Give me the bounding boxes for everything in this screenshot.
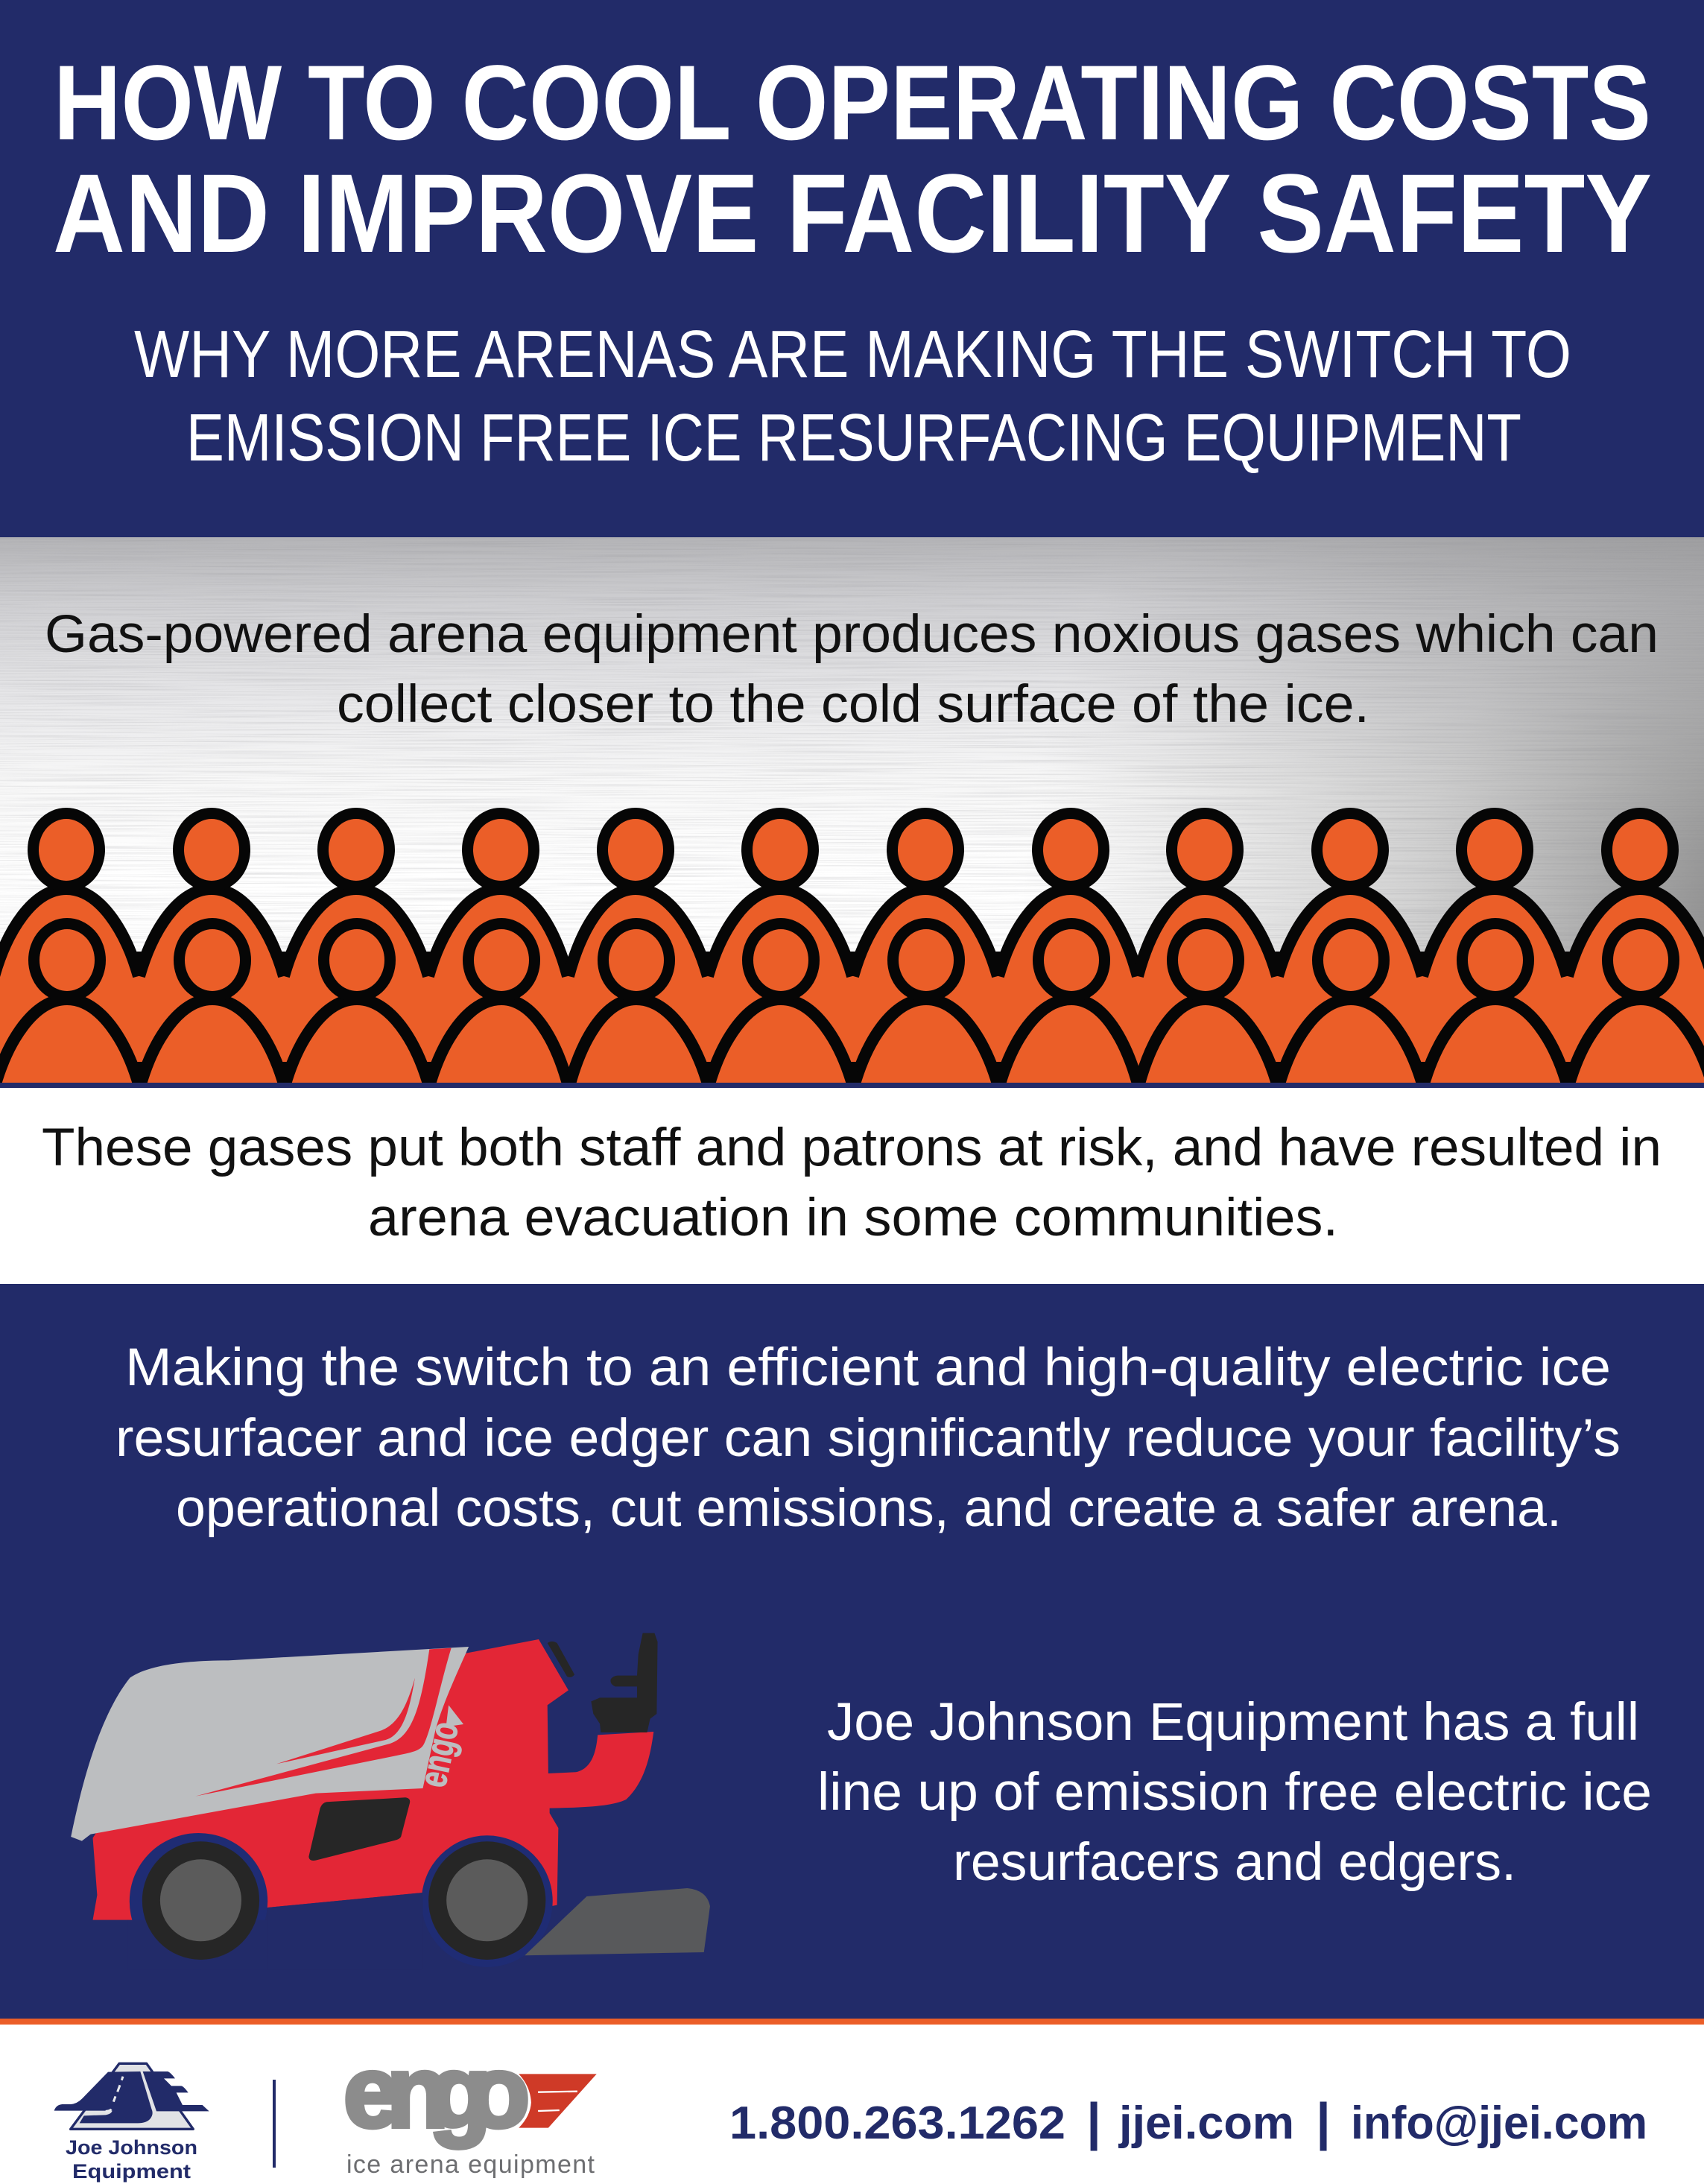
icon: electric ice resurfacer [71,1633,710,1969]
text block: making the switch: Making the switch to an efficient and high-quality electric ice [125,1338,1611,1397]
panel: header background [0,0,1704,537]
text block: noxious gases: Gas-powered arena equipment produces noxious gases which can [45,605,1659,664]
driver seat [591,1633,658,1732]
mirror [548,1642,574,1677]
subtitle [134,317,1571,475]
orange divider [0,2019,1704,2025]
wheel arches [130,1833,553,1969]
contact details: info@jjei.com [1351,2098,1647,2149]
window panel [308,1797,410,1861]
logo: Joe Johnson Equipment [54,2063,209,2183]
panel: navy lower section [0,1284,1704,2019]
text block: noxious gases: collect closer to the cold surface of the ice. [337,675,1369,734]
text block: full line up: line up of emission free electric ice [817,1763,1652,1822]
contact details: 1.800.263.1262 [729,2098,1065,2149]
logo: Joe Johnson Equipment: Joe Johnson [66,2136,197,2159]
logo: engo ice arena equipment: ice arena equipment [346,2150,595,2179]
wheels [142,1841,545,1960]
logo divider [273,2080,276,2168]
logo: Joe Johnson Equipment: Equipment [72,2160,191,2183]
logo: engo ice arena equipment: engo [343,2035,530,2148]
engo wing mark [446,1705,463,1726]
resurfacer engo label: engo [411,1718,467,1791]
text block: full line up [817,1693,1652,1892]
front row of people [0,924,1704,1086]
crowd of people [0,814,1704,1086]
text block: making the switch: resurfacer and ice edger can significantly reduce your facility’s [115,1409,1621,1468]
contact details: | [1316,2092,1331,2151]
title [53,44,1652,276]
contact details: jjei.com [1118,2098,1294,2149]
contact details [729,2092,1647,2151]
contact details: | [1086,2092,1101,2151]
text block: risk to staff and patrons: These gases put both staff and patrons at risk, and have resulted in [42,1118,1662,1177]
panel: brushed metal background [0,537,1704,1083]
text block: full line up: resurfacers and edgers. [953,1833,1516,1892]
text block: risk to staff and patrons: arena evacuation in some communities. [368,1188,1338,1247]
text block: noxious gases [45,605,1659,734]
logo: engo ice arena equipment [343,2035,597,2179]
back row of people [0,814,1704,976]
text block: making the switch: operational costs, cut emissions, and create a safer arena. [176,1479,1562,1538]
text block: making the switch [115,1338,1621,1538]
ice board [525,1888,710,1955]
text block: full line up: Joe Johnson Equipment has a full [827,1693,1639,1752]
text block: risk to staff and patrons [42,1118,1662,1247]
resurfacer red body [93,1639,653,1932]
red hood stripes [195,1648,452,1797]
resurfacer grey hood [71,1647,469,1841]
